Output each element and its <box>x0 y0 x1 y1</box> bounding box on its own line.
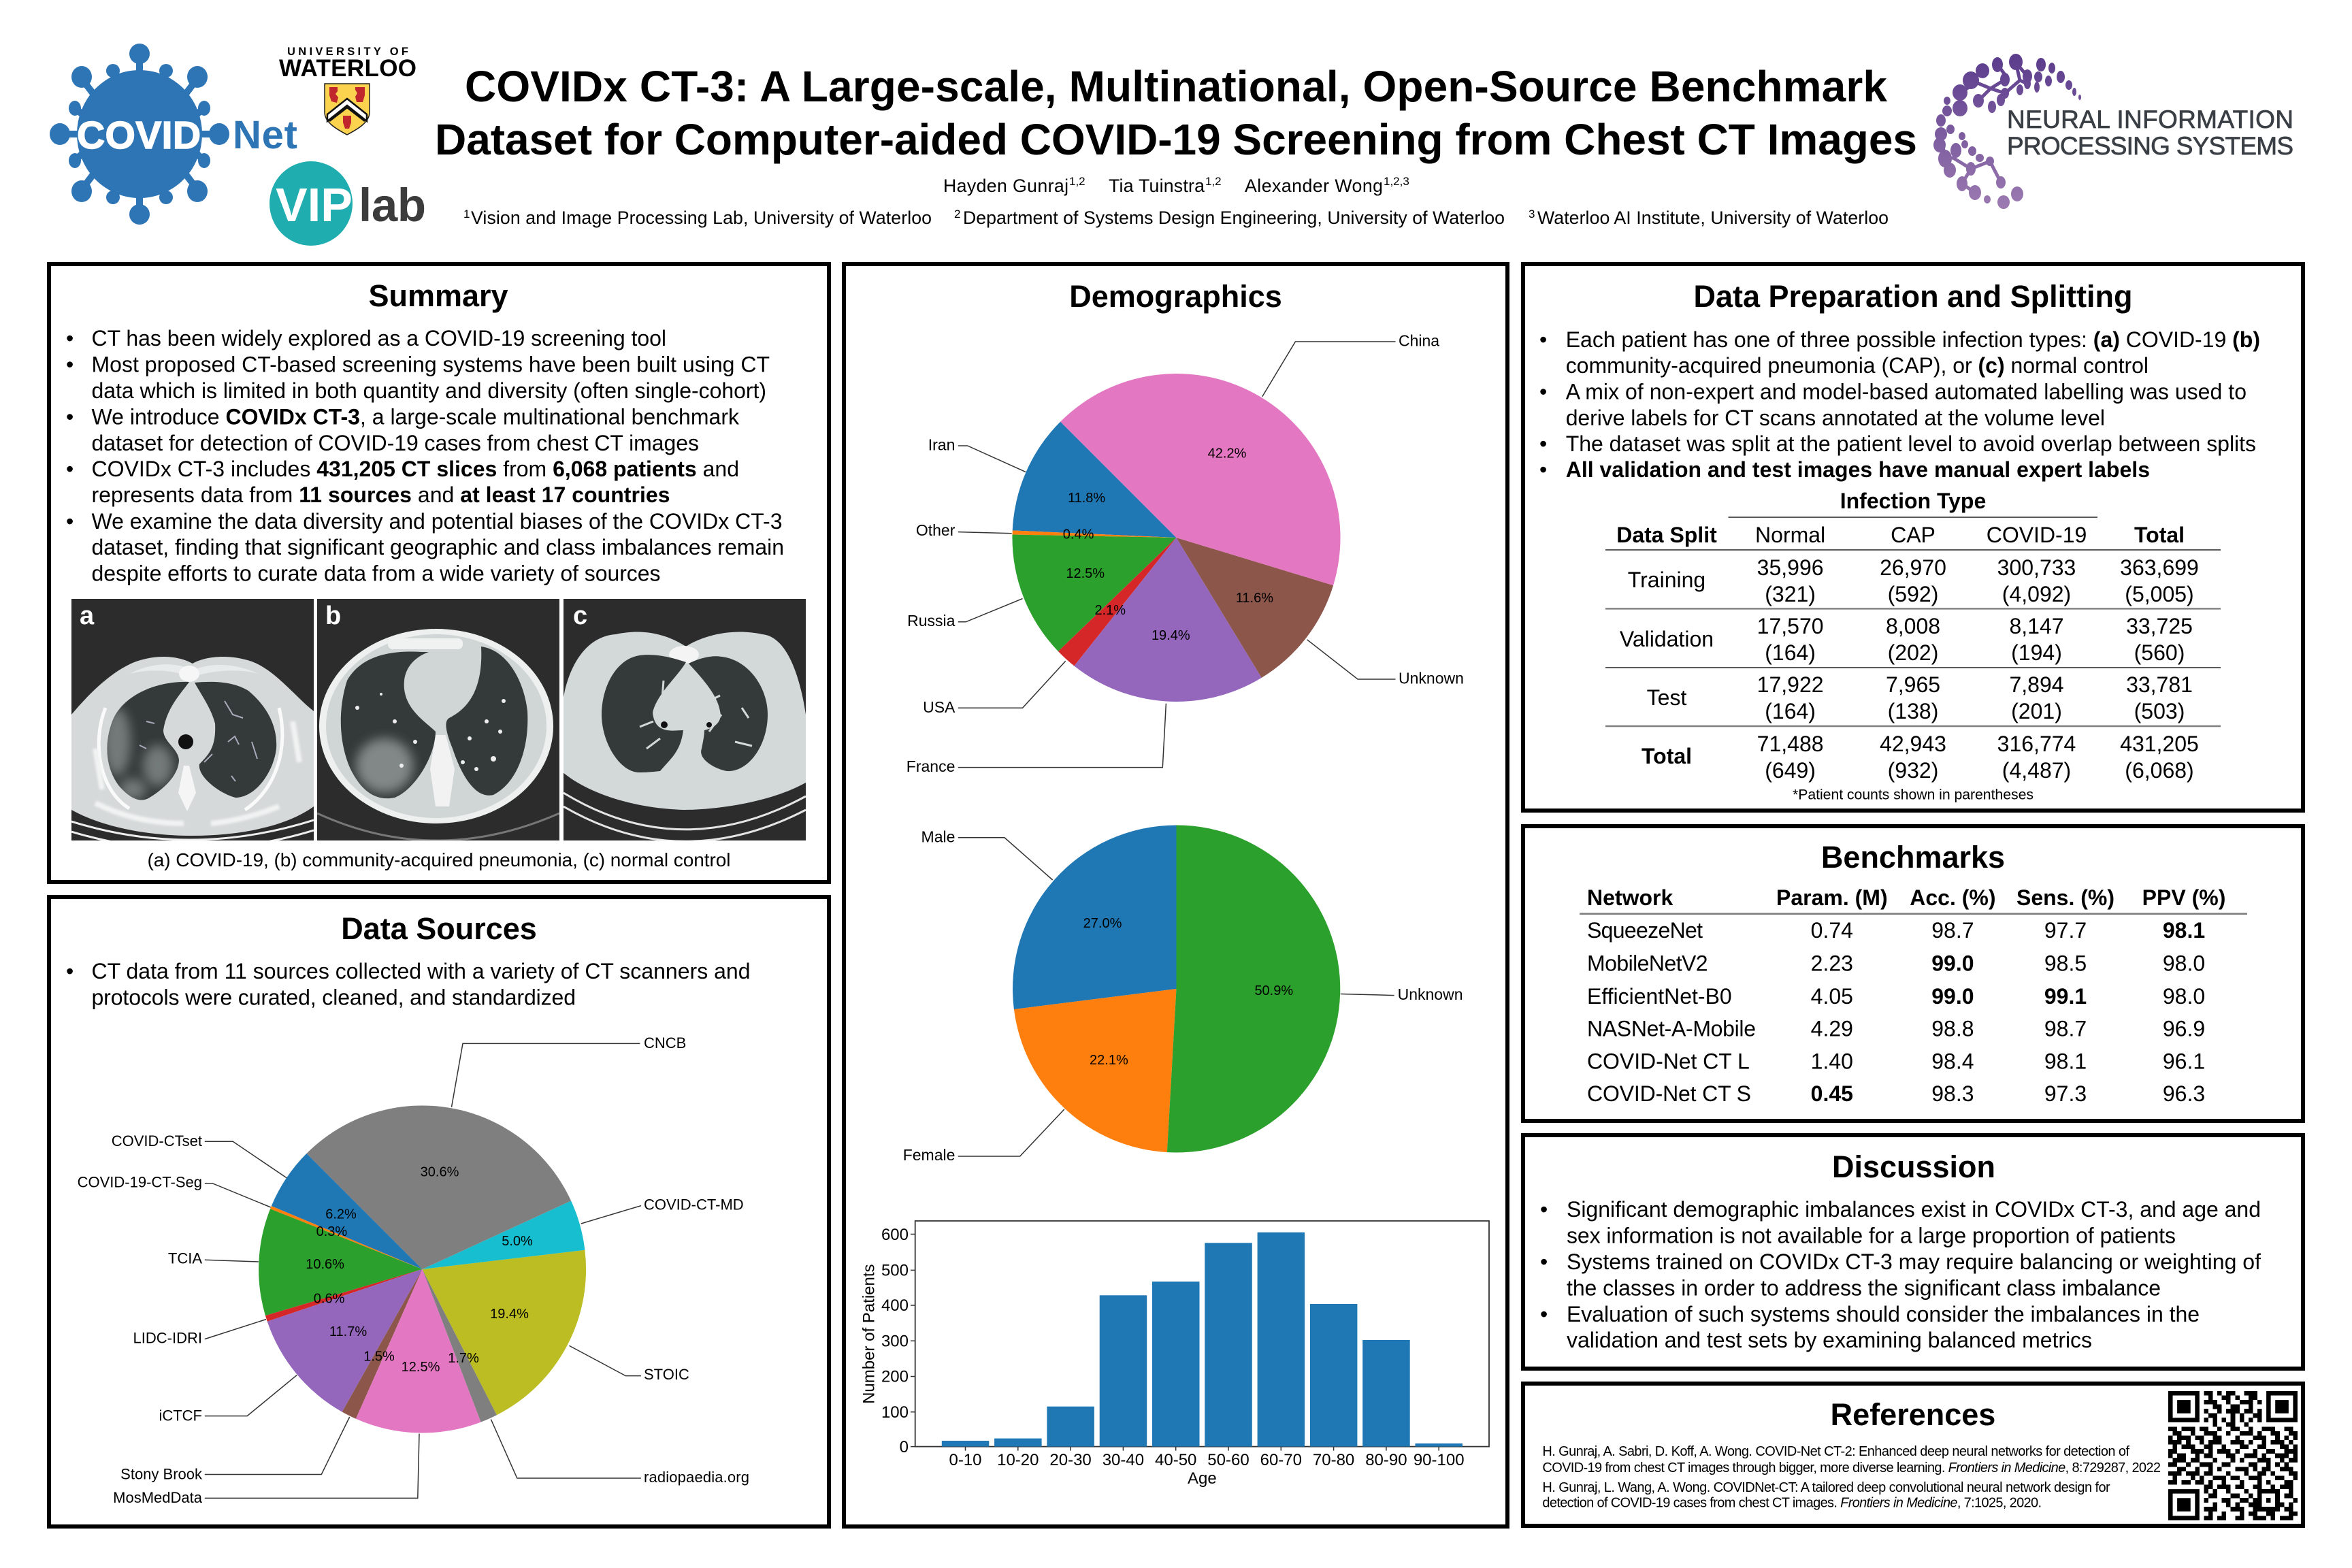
pie chart: data sources: 0.6% <box>314 1292 345 1307</box>
panel: Benchmarks <box>1523 826 2303 1121</box>
table: infection types by data split: (4,092) <box>2002 582 2071 606</box>
table: infection types by data split: Infection Type <box>1840 489 1986 513</box>
text block: summary bullets: • <box>66 326 74 350</box>
bar chart: age distribution: 70-80 <box>1313 1451 1354 1469</box>
pie chart: countries: Iran <box>928 436 955 454</box>
bar chart: age distribution: 50-60 <box>1207 1451 1250 1469</box>
affiliations: 2 <box>954 208 960 220</box>
authors: Alexander Wong <box>1245 176 1383 196</box>
pie chart: data sources: MosMedData <box>113 1489 203 1506</box>
logo: VIP lab <box>270 161 426 246</box>
table: benchmark results: Acc. (%) <box>1910 885 1996 910</box>
table: infection types by data split: (138) <box>1888 699 1938 723</box>
pie chart: sex: 27.0% <box>1083 916 1122 931</box>
table: benchmark results: COVID-Net CT L <box>1587 1049 1750 1074</box>
bar chart: age distribution <box>860 1221 1489 1488</box>
table: infection types by data split: 17,570 <box>1757 614 1824 638</box>
text block: summary bullets: CT has been widely explored as a COVID-19 screening tool <box>91 326 666 350</box>
table: benchmark results: 98.0 <box>2163 951 2205 976</box>
text block: summary bullets: • <box>66 457 74 481</box>
table: infection types by data split: Data Split <box>1616 523 1717 547</box>
text block: discussion bullets: sex information is not available for a large proportion of patients <box>1567 1224 2176 1248</box>
table: infection types by data split: Total <box>1642 744 1692 768</box>
text block: summary bullets: dataset, finding that significant geographic and class imbalances remain <box>91 535 784 559</box>
table: infection types by data split: (6,068) <box>2125 758 2194 783</box>
text block: data sources bullet: • <box>66 959 74 983</box>
table: infection types by data split: Test <box>1647 685 1686 710</box>
pie chart: data sources: 5.0% <box>502 1234 533 1249</box>
text block: reference list: H. Gunraj, A. Sabri, D. Koff, A. Wong. COVID-Net CT-2: Enhanced deep neural networks for detection of <box>1542 1444 2129 1459</box>
table: infection types by data split: (202) <box>1888 640 1938 665</box>
logo: COVID-Net <box>50 44 297 225</box>
logo: COVID-Net: COVID <box>77 114 201 157</box>
affiliations: Waterloo AI Institute, University of Waterloo <box>1537 208 1889 228</box>
text block: summary bullets: Most proposed CT-based screening systems have been built using CT <box>91 353 770 377</box>
logo: Neural Information Processing Systems: NEURAL INFORMATION <box>2007 105 2293 133</box>
table: benchmark results: MobileNetV2 <box>1587 951 1708 976</box>
table: infection types by data split: (649) <box>1765 758 1816 783</box>
heading: Benchmarks <box>1821 840 2005 875</box>
text block: summary bullets <box>66 326 784 585</box>
bar chart: age distribution: 90-100 <box>1414 1451 1465 1469</box>
table: benchmark results: Network <box>1587 885 1673 910</box>
text block: summary bullets: We examine the data diversity and potential biases of the COVIDx CT-3 <box>91 509 783 534</box>
table: benchmark results: EfficientNet-B0 <box>1587 984 1732 1009</box>
pie chart: data sources: COVID-CTset <box>112 1132 202 1149</box>
text block: summary bullets: • <box>66 509 74 534</box>
logo: University of Waterloo <box>279 46 416 135</box>
authors: Tia Tuinstra <box>1109 176 1205 196</box>
table: infection types by data split: (5,005) <box>2125 582 2194 606</box>
pie chart: data sources: iCTCF <box>159 1407 202 1424</box>
text block: preparation bullets: • <box>1539 327 1547 352</box>
text block: discussion bullets: validation and test sets by examining balanced metrics <box>1567 1328 2092 1352</box>
table: infection types by data split: (4,487) <box>2002 758 2071 783</box>
pie chart: data sources: TCIA <box>168 1250 202 1267</box>
table: benchmark results: 98.1 <box>2163 918 2205 943</box>
logo: VIP lab: VIP <box>276 178 353 231</box>
panel: Demographics <box>844 264 1507 1526</box>
pie chart: countries: Russia <box>907 612 956 630</box>
pie chart: sex: 50.9% <box>1254 983 1293 998</box>
logo: COVID-Net: Net <box>233 113 297 157</box>
bar chart: age distribution: 400 <box>881 1296 909 1315</box>
bar chart: age distribution: 10-20 <box>997 1451 1039 1469</box>
pie chart: countries: 11.6% <box>1236 591 1273 606</box>
bar chart: age distribution: 30-40 <box>1102 1451 1144 1469</box>
pie chart: countries: 19.4% <box>1152 628 1190 643</box>
table: infection types by data split: (592) <box>1888 582 1938 606</box>
bar chart: age distribution: 60-70 <box>1260 1451 1302 1469</box>
image: CT slice a <box>71 599 314 849</box>
authors <box>943 175 1409 196</box>
pie chart: data sources: CNCB <box>644 1034 686 1051</box>
table: benchmark results: 98.5 <box>2044 951 2087 976</box>
text block: preparation bullets: The dataset was split at the patient level to avoid overlap between splits <box>1566 431 2256 456</box>
table: benchmark results: 96.3 <box>2163 1081 2205 1106</box>
panel: References <box>1523 1384 2303 1526</box>
caption: (a) COVID-19, (b) community-acquired pneumonia, (c) normal control <box>147 849 731 870</box>
text block: data sources bullet: CT data from 11 sources collected with a variety of CT scanners and <box>91 959 750 983</box>
table: benchmark results: 0.45 <box>1811 1081 1853 1106</box>
pie chart: data sources: 10.6% <box>306 1257 344 1272</box>
table: benchmark results: PPV (%) <box>2142 885 2225 910</box>
text block: preparation bullets: • <box>1539 431 1547 456</box>
table: benchmark results: 96.1 <box>2163 1049 2205 1074</box>
text block: discussion bullets: • <box>1540 1250 1548 1274</box>
pie chart: data sources: radiopaedia.org <box>644 1469 749 1486</box>
table: infection types by data split: 8,147 <box>2009 614 2064 638</box>
pie chart: countries: 11.8% <box>1068 491 1105 506</box>
panel: Discussion <box>1523 1135 2303 1369</box>
text block: summary bullets: We introduce COVIDx CT-3, a large-scale multinational benchmark <box>91 404 740 429</box>
pie chart: countries: China <box>1399 332 1439 350</box>
affiliations <box>463 208 1889 228</box>
text block: reference list: detection of COVID-19 cases from chest CT images. Frontiers in Medicine, 7:1025, 2020. <box>1542 1496 2042 1511</box>
panel: Data Preparation and Splitting <box>1523 264 2303 811</box>
bar chart: age distribution: 200 <box>881 1368 909 1386</box>
text block: summary bullets: • <box>66 353 74 377</box>
title: COVIDx CT-3: A Large-scale, Multinational, Open-Source Benchmark <box>465 62 1887 111</box>
authors: 1,2 <box>1069 175 1085 188</box>
text block: preparation bullets <box>1539 327 2260 482</box>
affiliations: 3 <box>1529 208 1535 220</box>
text block: summary bullets: COVIDx CT-3 includes 431,205 CT slices from 6,068 patients and <box>91 457 739 481</box>
logo: VIP lab: lab <box>359 179 426 231</box>
table: benchmark results: 96.9 <box>2163 1017 2205 1041</box>
table: infection types by data split: Normal <box>1755 523 1825 547</box>
logo: Neural Information Processing Systems: PROCESSING SYSTEMS <box>2007 132 2293 160</box>
pie chart: countries: 0.4% <box>1063 527 1094 542</box>
table: infection types by data split: (201) <box>2011 699 2062 723</box>
text block: discussion bullets: the classes in order to address the significant class imbalance <box>1567 1275 2161 1300</box>
table: infection types by data split: (932) <box>1888 758 1938 783</box>
bar chart: age distribution: 40-50 <box>1155 1451 1196 1469</box>
image: CT slice b <box>317 599 559 840</box>
affiliations: Department of Systems Design Engineering, University of Waterloo <box>963 208 1505 228</box>
table: benchmark results: COVID-Net CT S <box>1587 1081 1751 1106</box>
pie chart: data sources: COVID-CT-MD <box>644 1196 744 1213</box>
pie chart: data sources: 1.5% <box>363 1350 395 1365</box>
text block: preparation bullets: A mix of non-expert and model-based automated labelling was used to <box>1566 380 2247 404</box>
heading: Data Preparation and Splitting <box>1693 279 2133 314</box>
table: benchmark results: NASNet-A-Mobile <box>1587 1017 1756 1041</box>
table: infection types by data split: 431,205 <box>2120 732 2199 756</box>
heading: References <box>1831 1397 1995 1432</box>
table: benchmark results: Param. (M) <box>1776 885 1888 910</box>
image: CT slice c: c <box>573 602 587 630</box>
heading: Discussion <box>1832 1149 1995 1184</box>
table: benchmark results: 4.29 <box>1811 1017 1853 1041</box>
pie chart: data sources: Stony Brook <box>120 1466 203 1482</box>
pie chart: data sources: 6.2% <box>325 1207 357 1222</box>
pie chart: countries: 42.2% <box>1208 446 1247 461</box>
table: infection types by data split <box>1605 489 2221 783</box>
pie chart: sex <box>903 825 1463 1164</box>
title <box>435 62 1917 164</box>
text block: reference list: H. Gunraj, L. Wang, A. Wong. COVIDNet-CT: A tailored deep convolutional neural network design for <box>1542 1480 2110 1495</box>
table: benchmark results: 97.3 <box>2044 1081 2087 1106</box>
text block: preparation bullets: • <box>1539 457 1547 482</box>
text block: preparation bullets: • <box>1539 380 1547 404</box>
text block: reference list <box>1542 1444 2161 1511</box>
text block: summary bullets: • <box>66 404 74 429</box>
pie chart: sex: Male <box>921 828 955 845</box>
table: benchmark results: 99.1 <box>2044 984 2087 1009</box>
pie chart: countries: 12.5% <box>1066 566 1105 581</box>
table: infection types by data split: 26,970 <box>1880 555 1946 580</box>
table: infection types by data split: 71,488 <box>1757 732 1824 756</box>
table: infection types by data split: (194) <box>2011 640 2062 665</box>
affiliations: 1 <box>463 208 470 220</box>
heading: Data Sources: Data Sources <box>341 911 537 946</box>
table: infection types by data split: 33,725 <box>2126 614 2193 638</box>
logo: University of Waterloo: WATERLOO <box>279 55 416 82</box>
table: infection types by data split: (321) <box>1765 582 1816 606</box>
pie chart: data sources: LIDC-IDRI <box>133 1330 202 1347</box>
table: benchmark results: 99.0 <box>1931 984 1974 1009</box>
pie chart: data sources: 12.5% <box>402 1360 440 1375</box>
image: CT slice b: b <box>325 602 341 630</box>
text block: preparation bullets: All validation and test images have manual expert labels <box>1566 457 2150 482</box>
table: benchmark results: 99.0 <box>1931 951 1974 976</box>
affiliations: Vision and Image Processing Lab, University of Waterloo <box>471 208 932 228</box>
table: infection types by data split: 7,965 <box>1886 672 1940 697</box>
authors: 1,2,3 <box>1384 175 1409 188</box>
footnote: *Patient counts shown in parentheses <box>1793 787 2034 803</box>
text block: preparation bullets: community-acquired pneumonia (CAP), or (c) normal control <box>1566 353 2149 378</box>
text block: summary bullets: represents data from 11 sources and at least 17 countries <box>91 483 670 507</box>
pie chart: countries: France <box>906 757 955 775</box>
table: infection types by data split: 7,894 <box>2009 672 2064 697</box>
authors: 1,2 <box>1205 175 1222 188</box>
panel: Data Sources <box>49 897 829 1526</box>
text block: discussion bullets: Systems trained on COVIDx CT-3 may require balancing or weighting of <box>1567 1250 2261 1274</box>
pie chart: sex: Unknown <box>1398 985 1463 1003</box>
pie chart: data sources: 0.3% <box>316 1224 347 1239</box>
table: benchmark results <box>1580 885 2247 1106</box>
text block: preparation bullets: derive labels for CT scans annotated at the volume level <box>1566 406 2105 430</box>
pie chart: sex: Female <box>903 1146 955 1164</box>
pie chart: countries: 2.1% <box>1095 603 1126 618</box>
title: Dataset for Computer-aided COVID-19 Screening from Chest CT Images <box>435 115 1917 164</box>
text block: data sources bullet <box>66 959 750 1010</box>
table: infection types by data split: Validation <box>1620 627 1714 651</box>
pie chart: data sources: 11.7% <box>329 1324 367 1339</box>
pie chart: sex: 22.1% <box>1090 1053 1128 1068</box>
text block: summary bullets: data which is limited in both quantity and diversity (often single-cohort) <box>91 378 766 403</box>
table: benchmark results: Sens. (%) <box>2016 885 2114 910</box>
table: benchmark results: 4.05 <box>1811 984 1853 1009</box>
table: benchmark results: 98.7 <box>2044 1017 2087 1041</box>
authors: Hayden Gunraj <box>943 176 1068 196</box>
table: infection types by data split: 33,781 <box>2126 672 2193 697</box>
table: infection types by data split: 363,699 <box>2120 555 2199 580</box>
table: benchmark results: 1.40 <box>1811 1049 1853 1074</box>
pie chart: data sources: 1.7% <box>448 1351 479 1366</box>
panel: Summary <box>49 264 829 882</box>
bar chart: age distribution: 0 <box>900 1438 909 1456</box>
image: CT slice c <box>563 599 806 841</box>
bar chart: age distribution: 0-10 <box>949 1451 982 1469</box>
table: benchmark results: 98.1 <box>2044 1049 2087 1074</box>
bar chart: age distribution: 20-30 <box>1049 1451 1092 1469</box>
table: infection types by data split: 17,922 <box>1757 672 1824 697</box>
table: infection types by data split: Total <box>2134 523 2185 547</box>
text block: summary bullets: despite efforts to curate data from a wide variety of sources <box>91 561 660 585</box>
pie chart: data sources: 19.4% <box>490 1307 529 1322</box>
table: infection types by data split: 42,943 <box>1880 732 1946 756</box>
table: benchmark results: 97.7 <box>2044 918 2087 943</box>
table: benchmark results: 98.7 <box>1931 918 1974 943</box>
bar chart: age distribution: Age <box>1188 1469 1217 1488</box>
table: infection types by data split: 316,774 <box>1997 732 2076 756</box>
table: benchmark results: 98.4 <box>1931 1049 1974 1074</box>
bar chart: age distribution: 600 <box>881 1226 909 1244</box>
table: benchmark results: 0.74 <box>1811 918 1853 943</box>
table: infection types by data split: (560) <box>2134 640 2185 665</box>
text block: data sources bullet: protocols were curated, cleaned, and standardized <box>91 985 576 1010</box>
text block: reference list: COVID-19 from chest CT images through bigger, more diverse learning. Frontiers in Medicine, 8:729287, 2022 <box>1542 1460 2161 1475</box>
heading: Summary: Summary <box>368 278 508 313</box>
table: infection types by data split: Training <box>1628 568 1705 592</box>
text block: preparation bullets: Each patient has one of three possible infection types: (a) COVID-19 (b) <box>1566 327 2260 352</box>
table: infection types by data split: COVID-19 <box>1987 523 2087 547</box>
text block: summary bullets: dataset for detection of COVID-19 cases from chest CT images <box>91 431 699 455</box>
table: infection types by data split: 35,996 <box>1757 555 1824 580</box>
pie chart: countries: Unknown <box>1399 669 1464 687</box>
table: benchmark results: 2.23 <box>1811 951 1853 976</box>
table: benchmark results: 98.0 <box>2163 984 2205 1009</box>
text block: discussion bullets: • <box>1540 1302 1548 1326</box>
text block: discussion bullets <box>1540 1197 2261 1352</box>
heading: Demographics: Demographics <box>1069 279 1282 314</box>
pie chart: countries: USA <box>923 698 956 716</box>
icon: QR code <box>2168 1391 2298 1520</box>
table: infection types by data split: 300,733 <box>1997 555 2076 580</box>
text block: discussion bullets: Evaluation of such systems should consider the imbalances in the <box>1567 1302 2200 1326</box>
text block: discussion bullets: • <box>1540 1197 1548 1222</box>
table: benchmark results: SqueezeNet <box>1587 918 1703 943</box>
table: infection types by data split: (503) <box>2134 699 2185 723</box>
text block: discussion bullets: Significant demographic imbalances exist in COVIDx CT-3, and age and <box>1567 1197 2261 1222</box>
pie chart: data sources: COVID-19-CT-Seg <box>78 1174 202 1191</box>
bar chart: age distribution: 300 <box>881 1333 909 1350</box>
pie chart: data sources: 30.6% <box>421 1165 459 1180</box>
logo: University of Waterloo: UNIVERSITY OF <box>287 46 408 58</box>
pie chart: countries: Other <box>916 521 956 539</box>
table: infection types by data split: CAP <box>1891 523 1936 547</box>
table: infection types by data split: 8,008 <box>1886 614 1940 638</box>
image: CT slice a: a <box>80 602 95 630</box>
table: benchmark results: 98.3 <box>1931 1081 1974 1106</box>
bar chart: age distribution: 80-90 <box>1365 1451 1407 1469</box>
bar chart: age distribution: Number of Patients <box>860 1264 878 1404</box>
pie chart: data sources <box>78 1034 749 1506</box>
logo: Neural Information Processing Systems <box>1933 54 2293 209</box>
table: benchmark results: 98.8 <box>1931 1017 1974 1041</box>
table: infection types by data split: (164) <box>1765 640 1816 665</box>
bar chart: age distribution: 500 <box>881 1262 909 1279</box>
bar chart: age distribution: 100 <box>881 1403 909 1422</box>
pie chart: countries <box>906 332 1464 775</box>
pie chart: data sources: STOIC <box>644 1366 689 1383</box>
table: infection types by data split: (164) <box>1765 699 1816 723</box>
